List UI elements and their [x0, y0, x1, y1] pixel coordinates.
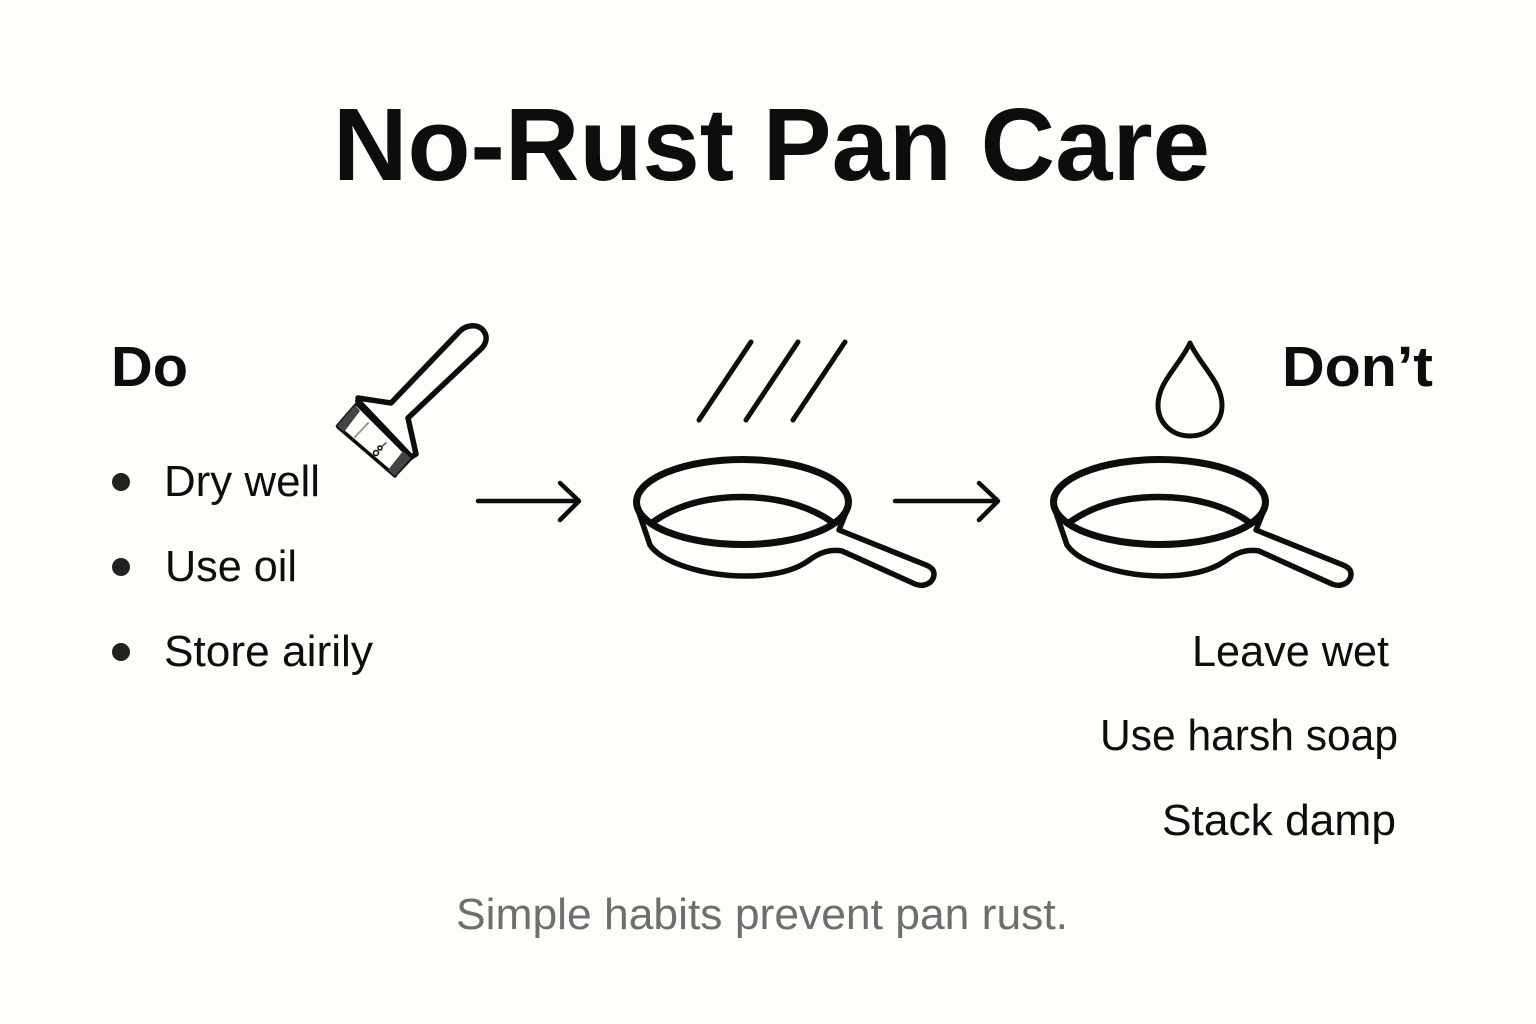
list item: dry well: Dry well — [164, 457, 320, 506]
list item: leave wet: Leave wet — [1192, 627, 1389, 676]
panel: don't list — [1100, 335, 1433, 845]
footer caption: Simple habits prevent pan rust. — [456, 890, 1068, 939]
icon: center pan — [636, 460, 934, 585]
icon: water drop — [1158, 343, 1222, 436]
arrow: pan to pan — [895, 483, 998, 520]
icon: right pan — [1054, 460, 1351, 585]
arrow: brush to pan — [478, 483, 579, 520]
panel: do list — [111, 335, 373, 676]
title: No-Rust Pan Care — [333, 87, 1210, 202]
icon: heat lines — [699, 342, 845, 420]
heading: do: Do — [111, 335, 188, 399]
icon: oil brush — [337, 326, 486, 476]
list item: store airily: Store airily — [164, 627, 373, 676]
list item: stack damp: Stack damp — [1162, 796, 1396, 845]
list item: use harsh soap: Use harsh soap — [1100, 711, 1398, 760]
heading: don't: Don’t — [1282, 335, 1433, 399]
list item: use oil: Use oil — [165, 542, 297, 591]
